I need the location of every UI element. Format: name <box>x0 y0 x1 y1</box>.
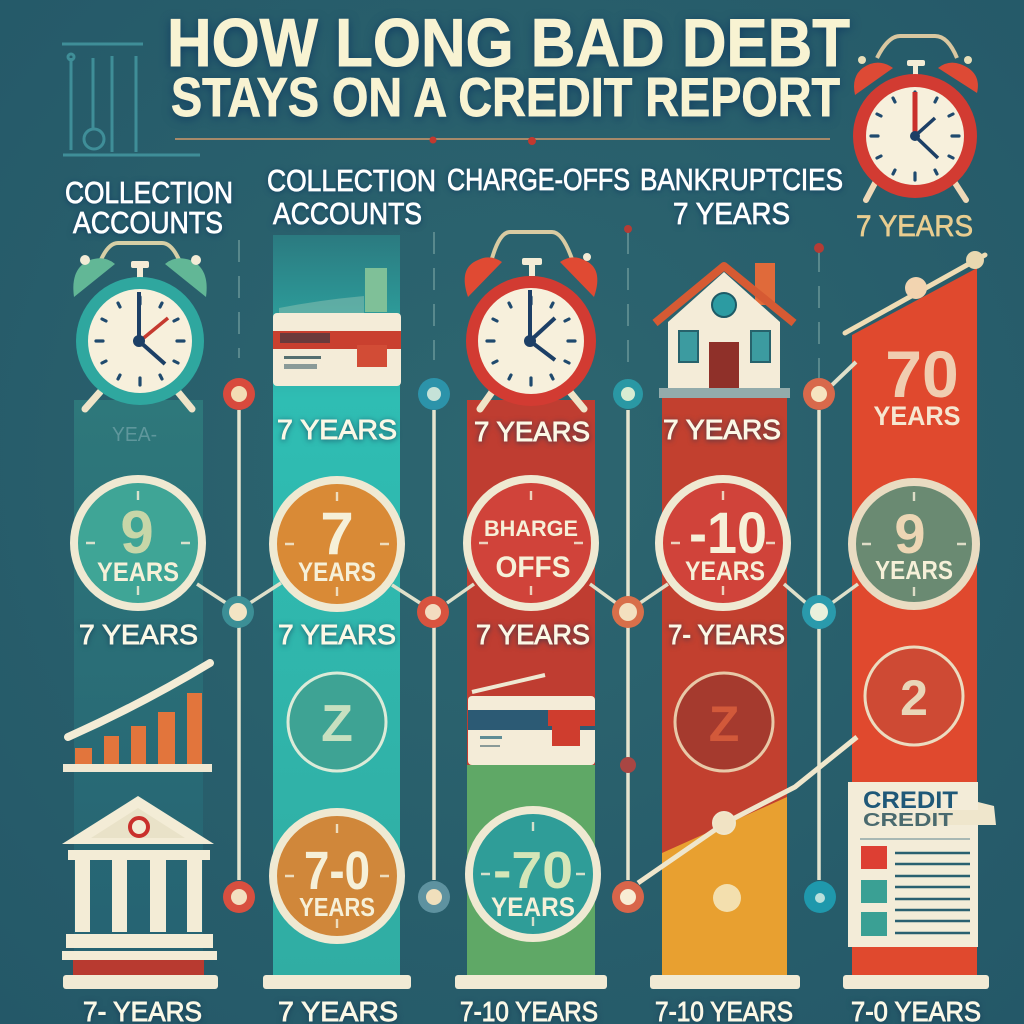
base plate <box>650 975 800 989</box>
badge: 7 years orange: 7 <box>320 500 354 567</box>
column headings: COLLECTION <box>65 175 233 210</box>
badge: small 2 <box>865 647 963 745</box>
badge: 9 years faded <box>852 482 976 606</box>
column headings: 7 YEARS <box>673 196 790 231</box>
coin <box>713 884 741 912</box>
badge: -70 years teal: -70 <box>493 842 573 900</box>
badge: small Z: Z <box>321 695 353 753</box>
label: 7 years: 7 YEARS <box>278 619 396 650</box>
label: 7- years: 7- YEARS <box>668 619 785 650</box>
badge: -10 years <box>659 479 787 607</box>
label: 7 years: 7 YEARS <box>474 416 590 447</box>
text: 70 years: 70 <box>885 337 959 411</box>
badge: -10 years: -10 <box>689 501 767 566</box>
badge: 9 years <box>74 479 202 607</box>
panel: column 2 collection accounts <box>263 235 411 1024</box>
badge: 7-0 years orange: YEARS <box>299 892 375 922</box>
badge: charge offs <box>467 479 595 607</box>
panel: column 5 bad debt <box>843 251 996 1024</box>
text: faded years: YEA- <box>112 424 157 446</box>
trend line top <box>845 251 985 333</box>
column headings: ACCOUNTS <box>73 205 223 240</box>
icon: bank building <box>62 796 217 975</box>
icon: top right red alarm clock <box>853 36 978 200</box>
text: 70 years <box>874 337 960 431</box>
panel: column 3 charge-offs <box>455 232 607 1024</box>
timeline nodes middle row <box>222 595 836 629</box>
label: 7 years: 7 YEARS <box>79 619 198 650</box>
badge: charge offs: BHARGE <box>484 516 578 541</box>
timeline nodes bottom row <box>223 881 836 913</box>
badge: -10 years: YEARS <box>685 556 765 586</box>
trend node <box>713 812 735 834</box>
icon: red alarm clock <box>465 232 597 409</box>
column headings: ACCOUNTS <box>273 196 422 231</box>
title: HOW LONG BAD DEBT <box>167 5 850 81</box>
base plate <box>63 975 218 989</box>
text: 70 years: YEARS <box>874 401 960 431</box>
timeline connectors <box>197 225 858 883</box>
column headings: BANKRUPTCIES <box>640 162 843 197</box>
badge: small 2: 2 <box>900 670 928 726</box>
label: top right 7 years: 7 YEARS <box>856 210 973 243</box>
base plate <box>455 975 607 989</box>
badge: small Z dark <box>675 673 773 771</box>
icon: credit card <box>468 675 595 765</box>
title <box>167 5 850 128</box>
badge: small Z <box>288 673 386 771</box>
decorative icon: hanging instruments <box>62 44 200 155</box>
badge: charge offs: OFFS <box>496 551 570 584</box>
icon: house <box>655 263 794 398</box>
column headings: COLLECTION <box>267 163 436 198</box>
badge: 9 years faded: YEARS <box>875 555 953 585</box>
icon: rising bar chart <box>63 663 212 772</box>
panel: column 4 bankruptcies <box>650 263 800 1024</box>
icon: credit card <box>273 268 401 386</box>
badge: 9 years: 9 <box>120 499 154 566</box>
panel: column 1 collection accounts <box>62 243 218 1024</box>
badge: 7 years orange: YEARS <box>298 557 376 587</box>
badge: 9 years: YEARS <box>97 557 179 587</box>
badge: -70 years teal: YEARS <box>491 892 575 922</box>
title: STAYS ON A CREDIT REPORT <box>171 66 840 128</box>
column headings <box>65 162 843 240</box>
base plate <box>263 975 411 989</box>
label: 7 years: 7 YEARS <box>476 619 590 650</box>
icon: teal alarm clock <box>73 243 207 409</box>
badge: small Z dark: Z <box>709 696 739 752</box>
column headings: CHARGE-OFFS <box>447 162 630 197</box>
label: 7 years: 7 YEARS <box>663 414 781 445</box>
icon: credit report: CREDIT <box>863 787 958 814</box>
badge: 9 years faded: 9 <box>894 502 926 565</box>
base plate <box>843 975 989 989</box>
icon: credit report: CREDIT <box>863 810 953 830</box>
badge: 7-0 years orange <box>273 812 401 940</box>
timeline nodes top row <box>223 378 835 410</box>
badge: -70 years teal <box>469 810 597 938</box>
badge: 7 years orange <box>273 480 401 608</box>
title divider <box>175 136 830 145</box>
icon: credit report <box>848 782 996 947</box>
badge: 7-0 years orange: 7-0 <box>304 841 370 901</box>
label: 7 years: 7 YEARS <box>277 414 397 445</box>
